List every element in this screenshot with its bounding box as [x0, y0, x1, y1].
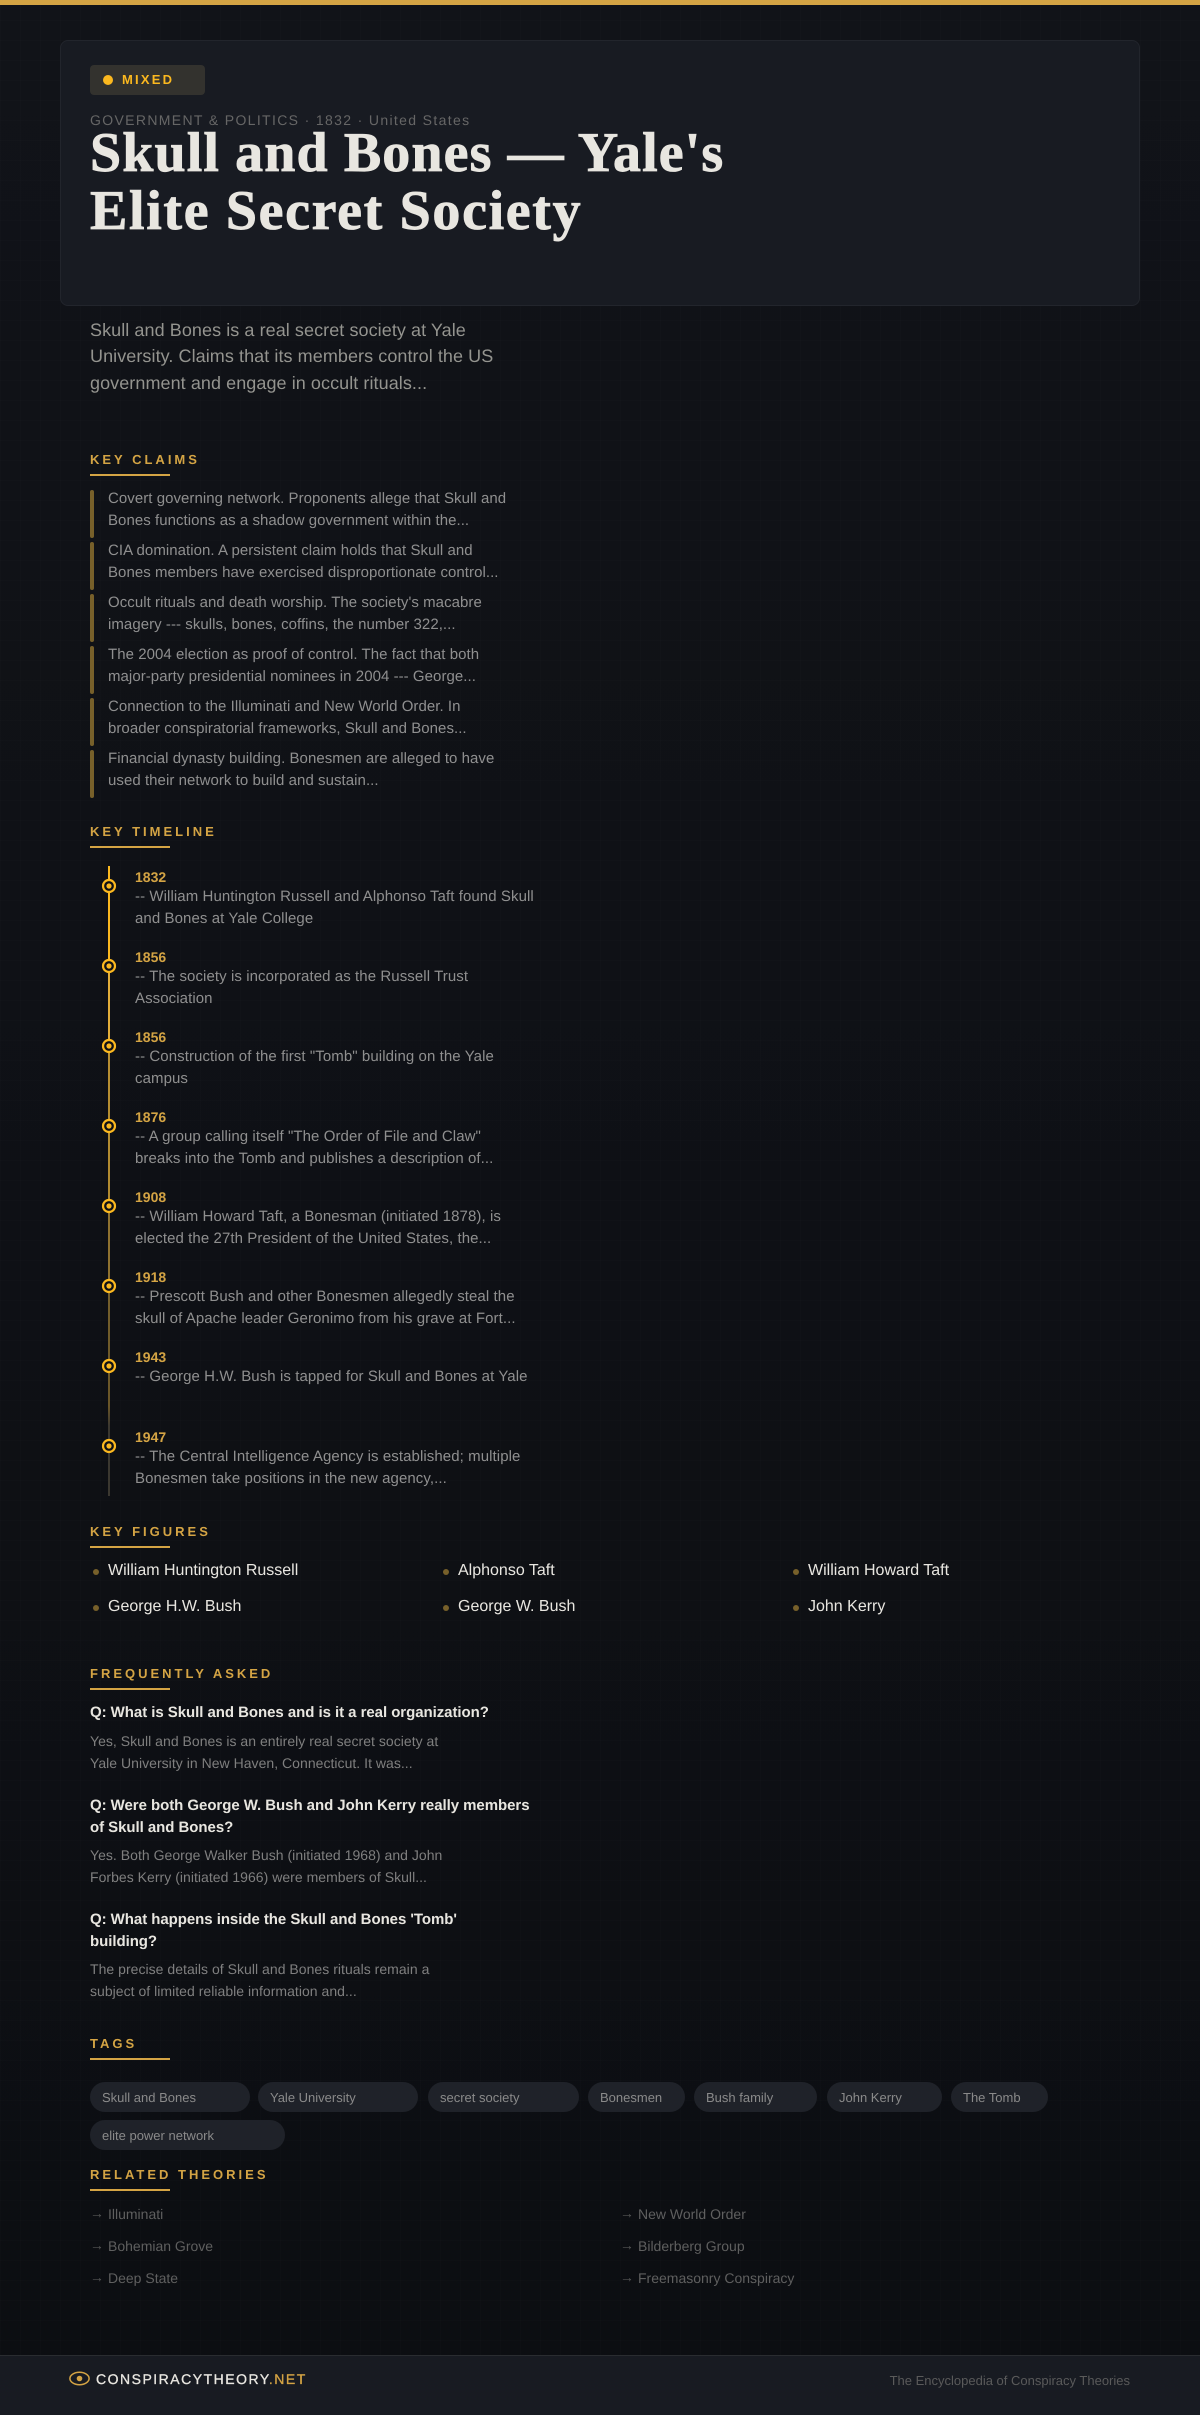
- related link: [620, 2204, 746, 2224]
- related link: [90, 2268, 178, 2288]
- heading: key claims: KEY CLAIMS: [90, 452, 200, 467]
- claim 3: [90, 594, 482, 642]
- icon: eye logo: [69, 2370, 91, 2388]
- event 1876: 1876: [135, 1109, 166, 1125]
- event 1856 tomb: -- Construction of the first "Tomb" building on the Yale: [135, 1048, 494, 1065]
- question 2: of Skull and Bones?: [90, 1819, 233, 1836]
- claim 5: [90, 698, 467, 746]
- tag: [258, 2082, 418, 2112]
- event 1943: [102, 1349, 528, 1385]
- event 1856: Association: [135, 990, 213, 1007]
- related link: [90, 2236, 213, 2256]
- claim 6: Financial dynasty building. Bonesmen are alleged to have: [108, 750, 494, 767]
- event 1832: 1832: [135, 869, 166, 885]
- question 2: Q: Were both George W. Bush and John Kerry really members: [90, 1797, 529, 1814]
- related link: →: [620, 2269, 634, 2285]
- claim 2: CIA domination. A persistent claim holds that Skull and: [108, 542, 473, 559]
- question 2: [90, 1797, 529, 1836]
- answer 3: [90, 1961, 430, 1999]
- event 1876: [102, 1109, 493, 1167]
- answer 2: [90, 1847, 442, 1885]
- question 3: building?: [90, 1933, 157, 1950]
- figure: William Howard Taft: [808, 1562, 949, 1579]
- figure: Alphonso Taft: [458, 1562, 555, 1579]
- summary: University. Claims that its members control the US: [90, 346, 493, 366]
- summary: Skull and Bones is a real secret society at Yale: [90, 320, 466, 340]
- footer: [0, 2355, 1200, 2415]
- event 1918: [102, 1269, 516, 1327]
- key figures grid: [93, 1562, 949, 1615]
- answer 1: Yes, Skull and Bones is an entirely real secret society at: [90, 1733, 438, 1749]
- related link: [620, 2236, 745, 2256]
- claim 1: [90, 490, 506, 538]
- answer 2: Yes. Both George Walker Bush (initiated 1968) and John: [90, 1847, 442, 1863]
- claim 4: The 2004 election as proof of control. The fact that both: [108, 646, 479, 663]
- claim 5: Connection to the Illuminati and New World Order. In: [108, 698, 460, 715]
- figure: George W. Bush: [458, 1598, 575, 1615]
- heading: related theories: RELATED THEORIES: [90, 2167, 268, 2182]
- timeline: [102, 866, 534, 1496]
- badge: mixed verdict: [90, 65, 205, 95]
- question 3: Q: What happens inside the Skull and Bones 'Tomb': [90, 1911, 457, 1928]
- claim 3: imagery --- skulls, bones, coffins, the number 322,...: [108, 616, 456, 633]
- category and date line: GOVERNMENT & POLITICS · 1832 · United States: [90, 112, 470, 128]
- heading: tags: TAGS: [90, 2036, 137, 2051]
- title: Skull and Bones — Yale's: [90, 122, 724, 184]
- related link: Illuminati: [108, 2206, 163, 2222]
- event 1947: Bonesmen take positions in the new agency,...: [135, 1470, 447, 1487]
- event 1908: [102, 1189, 501, 1247]
- tag: [90, 2082, 250, 2112]
- event 1832: [102, 869, 534, 927]
- tag: [90, 2120, 285, 2150]
- panel: hero: [60, 40, 1140, 306]
- event 1918: -- Prescott Bush and other Bonesmen allegedly steal the: [135, 1288, 515, 1305]
- event 1876: breaks into the Tomb and publishes a description of...: [135, 1150, 493, 1167]
- claim 2: Bones members have exercised disproportionate control...: [108, 564, 498, 581]
- related link: Freemasonry Conspiracy: [638, 2270, 794, 2286]
- claim 6: [90, 750, 494, 798]
- event 1947: [102, 1429, 520, 1487]
- related theories: [90, 2205, 794, 2286]
- answer 3: The precise details of Skull and Bones rituals remain a: [90, 1961, 429, 1977]
- related link: →: [620, 2205, 634, 2221]
- summary: [90, 320, 493, 393]
- event 1856 tomb: [102, 1029, 494, 1087]
- related link: Bohemian Grove: [108, 2238, 213, 2254]
- tag: Bonesmen: [600, 2090, 662, 2105]
- tag: [951, 2082, 1048, 2112]
- related link: →: [90, 2269, 104, 2285]
- related link: New World Order: [638, 2206, 746, 2222]
- question 3: [90, 1911, 457, 1950]
- related link: →: [90, 2205, 104, 2221]
- tag: Skull and Bones: [102, 2090, 196, 2105]
- tag: [694, 2082, 817, 2112]
- event 1832: and Bones at Yale College: [135, 910, 313, 927]
- tag: secret society: [440, 2090, 519, 2105]
- timeline spine: [108, 866, 110, 1496]
- claim 5: broader conspiratorial frameworks, Skull and Bones...: [108, 720, 467, 737]
- claim 1: Bones functions as a shadow government within the...: [108, 512, 469, 529]
- tag: elite power network: [102, 2128, 214, 2143]
- claim 4: major-party presidential nominees in 2004 --- George...: [108, 668, 476, 685]
- answer 1: Yale University in New Haven, Connecticut. It was...: [90, 1755, 413, 1771]
- badge: mixed verdict: MIXED: [122, 72, 174, 87]
- related link: →: [90, 2237, 104, 2253]
- claim 4: [90, 646, 479, 694]
- heading: frequently asked: FREQUENTLY ASKED: [90, 1666, 273, 1681]
- tagline: The Encyclopedia of Conspiracy Theories: [890, 2373, 1130, 2388]
- title: Elite Secret Society: [90, 180, 582, 242]
- event 1856 tomb: campus: [135, 1070, 188, 1087]
- answer 3: subject of limited reliable information and...: [90, 1983, 357, 1999]
- tag: [588, 2082, 685, 2112]
- summary: government and engage in occult rituals...: [90, 373, 427, 393]
- question 1: Q: What is Skull and Bones and is it a real organization?: [90, 1704, 489, 1721]
- event 1943: -- George H.W. Bush is tapped for Skull and Bones at Yale: [135, 1368, 528, 1385]
- faq list: [90, 1704, 529, 1999]
- tag: [428, 2082, 579, 2112]
- heading: key figures: KEY FIGURES: [90, 1524, 211, 1539]
- related link: Bilderberg Group: [638, 2238, 745, 2254]
- event 1943: 1943: [135, 1349, 166, 1365]
- event 1918: skull of Apache leader Geronimo from his grave at Fort...: [135, 1310, 516, 1327]
- tag: The Tomb: [963, 2090, 1021, 2105]
- answer 2: Forbes Kerry (initiated 1966) were members of Skull...: [90, 1869, 427, 1885]
- event 1876: -- A group calling itself "The Order of File and Claw": [135, 1128, 481, 1145]
- tag: John Kerry: [839, 2090, 902, 2105]
- top accent bar: [0, 0, 1200, 5]
- tag: Yale University: [270, 2090, 356, 2105]
- event 1856 tomb: 1856: [135, 1029, 166, 1045]
- event 1908: -- William Howard Taft, a Bonesman (initiated 1878), is: [135, 1208, 501, 1225]
- event 1856: -- The society is incorporated as the Russell Trust: [135, 968, 468, 985]
- heading: key timeline: KEY TIMELINE: [90, 824, 217, 839]
- event 1947: 1947: [135, 1429, 166, 1445]
- claim 6: used their network to build and sustain...: [108, 772, 379, 789]
- claim 3: Occult rituals and death worship. The society's macabre: [108, 594, 482, 611]
- title: [90, 122, 724, 242]
- event 1947: -- The Central Intelligence Agency is established; multiple: [135, 1448, 520, 1465]
- tags: [90, 2082, 1048, 2150]
- answer 1: [90, 1733, 438, 1771]
- claim 2: [90, 542, 498, 590]
- event 1856: [102, 949, 468, 1007]
- related link: →: [620, 2237, 634, 2253]
- brand wordmark: CONSPIRACYTHEORY.NET: [96, 2371, 307, 2387]
- event 1908: elected the 27th President of the United States, the...: [135, 1230, 491, 1247]
- figure: John Kerry: [808, 1598, 885, 1615]
- panel: key claims list: [90, 490, 506, 798]
- related link: Deep State: [108, 2270, 178, 2286]
- event 1832: -- William Huntington Russell and Alphonso Taft found Skull: [135, 888, 534, 905]
- event 1918: 1918: [135, 1269, 166, 1285]
- figure: George H.W. Bush: [108, 1598, 241, 1615]
- event 1856: 1856: [135, 949, 166, 965]
- tag: Bush family: [706, 2090, 773, 2105]
- event 1908: 1908: [135, 1189, 166, 1205]
- claim 1: Covert governing network. Proponents allege that Skull and: [108, 490, 506, 507]
- tag: [827, 2082, 942, 2112]
- figure: William Huntington Russell: [108, 1562, 298, 1579]
